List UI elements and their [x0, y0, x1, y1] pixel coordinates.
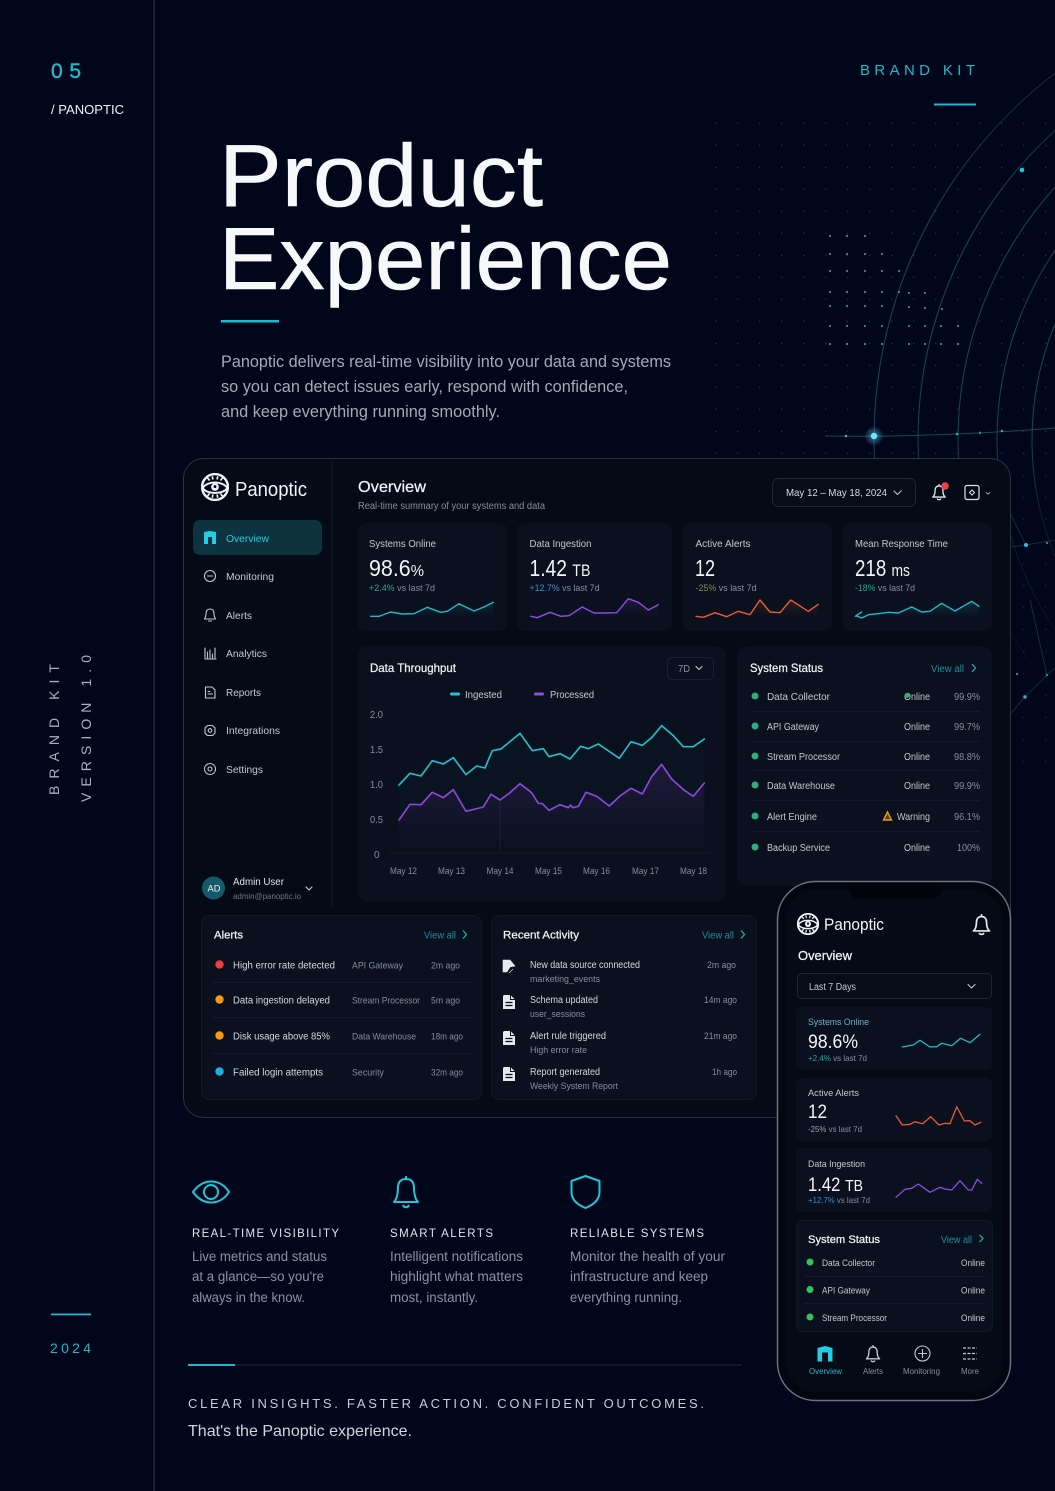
x axis: May 18: [680, 866, 707, 877]
alert rows: Failed login attempts: [233, 1068, 323, 1078]
left rail: [46, 60, 124, 1356]
sidebar navigation: Analytics: [226, 648, 267, 660]
activity rows: marketing_events: [530, 974, 601, 984]
KPI: mean response time: 218 ms: [855, 555, 910, 581]
phone card: system status: [796, 1220, 992, 1332]
settings box icon: [965, 486, 990, 500]
x axis: May 15: [535, 866, 562, 877]
feature: reliable systems: RELIABLE SYSTEMS: [570, 1228, 704, 1240]
panel: alerts: View all: [424, 930, 456, 942]
alert rows: Stream Processor: [352, 996, 420, 1006]
feature: smart alerts: highlight what matters: [390, 1269, 523, 1284]
legend: Ingested: [465, 689, 502, 701]
phone card: system status: API Gateway: [822, 1286, 871, 1296]
chart panel: data throughput: Data Throughput: [370, 661, 457, 675]
date range picker: May 12 – May 18, 2024: [786, 487, 887, 499]
activity rows: 2m ago: [707, 960, 736, 970]
admin user: [202, 876, 312, 901]
status rows: Warning: [897, 812, 930, 823]
status rows: Stream Processor: [767, 752, 841, 763]
alert rows: API Gateway: [352, 960, 403, 970]
y axis: [370, 710, 383, 861]
activity rows: Report generated: [530, 1067, 600, 1078]
page header: Overview: [358, 479, 426, 496]
phone header: Panoptic: [824, 915, 884, 934]
panel: system status: View all: [931, 664, 964, 675]
phone card: system status: Data Collector: [822, 1258, 875, 1268]
phone card: data ingestion: [796, 1148, 992, 1212]
notch: [848, 886, 943, 899]
phone card: systems online: +2.4% vs last 7d: [808, 1053, 867, 1063]
KPI: mean response time: Mean Response Time: [855, 538, 948, 550]
feature: smart alerts: Intelligent notifications: [390, 1249, 523, 1264]
section name: / PANOPTIC: [51, 102, 124, 117]
KPI: systems online: +2.4% vs last 7d: [369, 583, 435, 593]
activity rows: High error rate: [530, 1045, 587, 1055]
vertical brand kit label: BRAND KIT: [46, 664, 62, 795]
phone card: data ingestion: 1.42 TB: [808, 1175, 863, 1196]
KPI: systems online: [358, 523, 507, 631]
status rows: Data Warehouse: [767, 781, 836, 792]
icon: bell: [394, 1176, 418, 1207]
panel: recent activity: [492, 916, 756, 1100]
phone bottom navigation: Alerts: [863, 1367, 883, 1376]
KPI: data ingestion: Data Ingestion: [530, 538, 592, 550]
phone bottom navigation: More: [961, 1367, 980, 1376]
phone bottom navigation: Monitoring: [903, 1367, 940, 1376]
top right brand kit label: [860, 62, 976, 106]
sidebar logo: Panoptic: [235, 479, 307, 501]
closing tagline: [188, 1396, 704, 1440]
year: 2024: [50, 1340, 91, 1356]
status rows: 98.8%: [954, 752, 980, 763]
KPI: data ingestion: 1.42 TB: [530, 555, 590, 581]
status rows: Online: [904, 722, 930, 733]
vertical version label: VERSION 1.0: [78, 655, 94, 802]
phone card: data ingestion: Data Ingestion: [808, 1159, 865, 1170]
title: Experience: [219, 209, 672, 308]
year tick: [51, 1314, 91, 1315]
alert rows: [215, 960, 463, 1078]
notification bell: [933, 482, 949, 500]
alert rows: 18m ago: [431, 1032, 463, 1042]
icon: eye: [193, 1182, 229, 1202]
range selector: 7D: [678, 664, 690, 675]
alert rows: Data ingestion delayed: [233, 996, 330, 1006]
top right brand kit label: BRAND KIT: [860, 62, 975, 79]
feature: real-time visibility: [192, 1182, 339, 1305]
phone card: system status: Stream Processor: [822, 1313, 887, 1323]
activity rows: Alert rule triggered: [530, 1031, 606, 1042]
phone card: systems online: [796, 1007, 992, 1070]
icon: shield: [572, 1176, 600, 1208]
sidebar navigation: Integrations: [226, 725, 280, 737]
KPI: systems online: Systems Online: [369, 538, 436, 550]
x axis: May 14: [486, 866, 514, 877]
title accent line: [221, 320, 279, 322]
intro paragraph: Panoptic delivers real-time visibility into your data and systems: [221, 352, 671, 371]
phone card: systems online: 98.6%: [808, 1032, 858, 1053]
intro paragraph: [221, 352, 671, 421]
KPI: active alerts: -25% vs last 7d: [696, 583, 757, 593]
feature: reliable systems: infrastructure and keep: [570, 1269, 708, 1284]
phone card: data ingestion: +12.7% vs last 7d: [808, 1195, 870, 1205]
activity rows: Schema updated: [530, 995, 598, 1006]
status rows: Online: [904, 781, 930, 792]
phone card: system status: Online: [961, 1313, 985, 1323]
chart panel: data throughput: [358, 646, 726, 902]
KPI: mean response time: [843, 523, 992, 631]
title: Product: [219, 126, 543, 225]
closing rule: [188, 1364, 742, 1366]
admin user: AD: [208, 884, 221, 894]
date range picker: [772, 478, 916, 506]
sidebar navigation: Settings: [226, 764, 263, 776]
phone overview heading: Overview: [798, 948, 853, 963]
status rows: 100%: [957, 843, 980, 854]
KPI: data ingestion: +12.7% vs last 7d: [530, 583, 600, 593]
panel: recent activity: View all: [702, 930, 734, 942]
feature: real-time visibility: at a glance—so you're: [192, 1269, 324, 1284]
phone card: active alerts: -25% vs last 7d: [808, 1124, 862, 1134]
panel: desktop dashboard: [184, 458, 1010, 1118]
status rows: Backup Service: [767, 843, 830, 854]
admin user: admin@panoptic.io: [233, 892, 302, 901]
status rows: Online: [904, 692, 930, 703]
activity rows: Weekly System Report: [530, 1081, 619, 1091]
status rows: 99.7%: [954, 722, 980, 733]
activity rows: 14m ago: [704, 995, 737, 1005]
closing tagline: That's the Panoptic experience.: [188, 1423, 412, 1440]
phone card: systems online: Systems Online: [808, 1017, 869, 1028]
phone card: active alerts: 12: [808, 1102, 827, 1123]
status rows: Online: [904, 752, 930, 763]
alert rows: Disk usage above 85%: [233, 1032, 330, 1042]
sidebar navigation: Reports: [226, 687, 261, 699]
phone card: system status: System Status: [808, 1234, 881, 1246]
legend: Processed: [550, 689, 594, 701]
activity rows: New data source connected: [530, 960, 640, 971]
section number: 05: [51, 60, 81, 83]
page header: [358, 479, 545, 512]
KPI: active alerts: Active Alerts: [696, 538, 750, 550]
left rail divider: [154, 0, 155, 1491]
line series: [399, 726, 704, 852]
feature: smart alerts: SMART ALERTS: [390, 1228, 493, 1240]
sidebar logo: [202, 474, 307, 501]
background tech pattern: dots, arcs and nodes: [715, 0, 1055, 902]
y axis: 0: [374, 850, 380, 861]
legend: [450, 689, 594, 701]
x axis: May 16: [583, 866, 610, 877]
KPI: data ingestion: [517, 523, 672, 631]
status rows: Alert Engine: [767, 812, 818, 823]
closing tagline: CLEAR INSIGHTS. FASTER ACTION. CONFIDENT OUTCOMES.: [188, 1396, 704, 1411]
phone range dropdown: [798, 974, 992, 998]
admin user: Admin User: [233, 877, 285, 888]
status rows: Online: [904, 843, 930, 854]
x axis: [390, 866, 707, 877]
alert rows: 32m ago: [431, 1068, 463, 1078]
y axis: 1.5: [370, 745, 383, 756]
alert rows: High error rate detected: [233, 960, 335, 972]
feature: real-time visibility: always in the know.: [192, 1290, 305, 1305]
panel: alerts: [202, 916, 482, 1100]
KPI: active alerts: [683, 523, 832, 631]
intro paragraph: and keep everything running smoothly.: [221, 402, 500, 421]
activity rows: 21m ago: [704, 1031, 737, 1041]
page header: Real-time summary of your systems and data: [358, 501, 545, 512]
status rows: 96.1%: [954, 812, 980, 823]
phone bottom navigation: [809, 1346, 980, 1376]
feature: smart alerts: most, instantly.: [390, 1290, 478, 1305]
feature: reliable systems: Monitor the health of your: [570, 1249, 726, 1264]
alert rows: 2m ago: [431, 960, 460, 970]
KPI: systems online: 98.6%: [369, 555, 424, 581]
alert rows: Security: [352, 1068, 384, 1078]
activity rows: [503, 960, 737, 1091]
phone card: active alerts: Active Alerts: [808, 1088, 859, 1099]
sidebar navigation: Alerts: [226, 610, 252, 622]
status rows: 99.9%: [954, 781, 980, 792]
phone mockup: [778, 882, 1010, 1400]
panel: system status: System Status: [750, 661, 823, 675]
x axis: May 12: [390, 866, 417, 877]
feature: smart alerts: [390, 1176, 523, 1305]
y axis: 2.0: [370, 710, 383, 721]
feature: real-time visibility: Live metrics and status: [192, 1249, 327, 1264]
activity rows: user_sessions: [530, 1009, 586, 1019]
panel: system status: [737, 646, 992, 886]
alert rows: 5m ago: [431, 996, 460, 1006]
range selector: [668, 658, 714, 680]
status rows: [752, 692, 980, 854]
sidebar navigation: [193, 520, 322, 776]
y axis: 0.5: [370, 815, 383, 826]
panel: recent activity: Recent Activity: [503, 930, 580, 942]
panel: alerts: Alerts: [214, 930, 244, 942]
phone header: [798, 914, 990, 934]
status rows: API Gateway: [767, 722, 819, 733]
phone card: system status: View all: [941, 1235, 972, 1246]
sidebar navigation: Monitoring: [226, 571, 274, 583]
feature: reliable systems: [570, 1176, 726, 1305]
status rows: 99.9%: [954, 692, 980, 703]
x axis: May 17: [632, 866, 659, 877]
phone card: active alerts: [796, 1078, 992, 1141]
KPI: active alerts: 12: [695, 555, 715, 581]
phone card: system status: Online: [961, 1258, 985, 1268]
activity rows: 1h ago: [712, 1067, 737, 1077]
phone card: system status: Online: [961, 1286, 985, 1296]
phone bottom navigation: Overview: [809, 1367, 842, 1376]
title: [219, 126, 672, 308]
feature: reliable systems: everything running.: [570, 1290, 682, 1305]
feature: real-time visibility: REAL-TIME VISIBILITY: [192, 1228, 339, 1240]
x axis: May 13: [438, 866, 465, 877]
KPI: mean response time: -18% vs last 7d: [855, 583, 915, 593]
status rows: Data Collector: [767, 692, 831, 703]
alert rows: Data Warehouse: [352, 1032, 416, 1042]
intro paragraph: so you can detect issues early, respond with confidence,: [221, 377, 628, 396]
sidebar navigation: Overview: [226, 533, 269, 545]
phone range dropdown: Last 7 Days: [809, 982, 856, 993]
y axis: 1.0: [370, 780, 383, 791]
